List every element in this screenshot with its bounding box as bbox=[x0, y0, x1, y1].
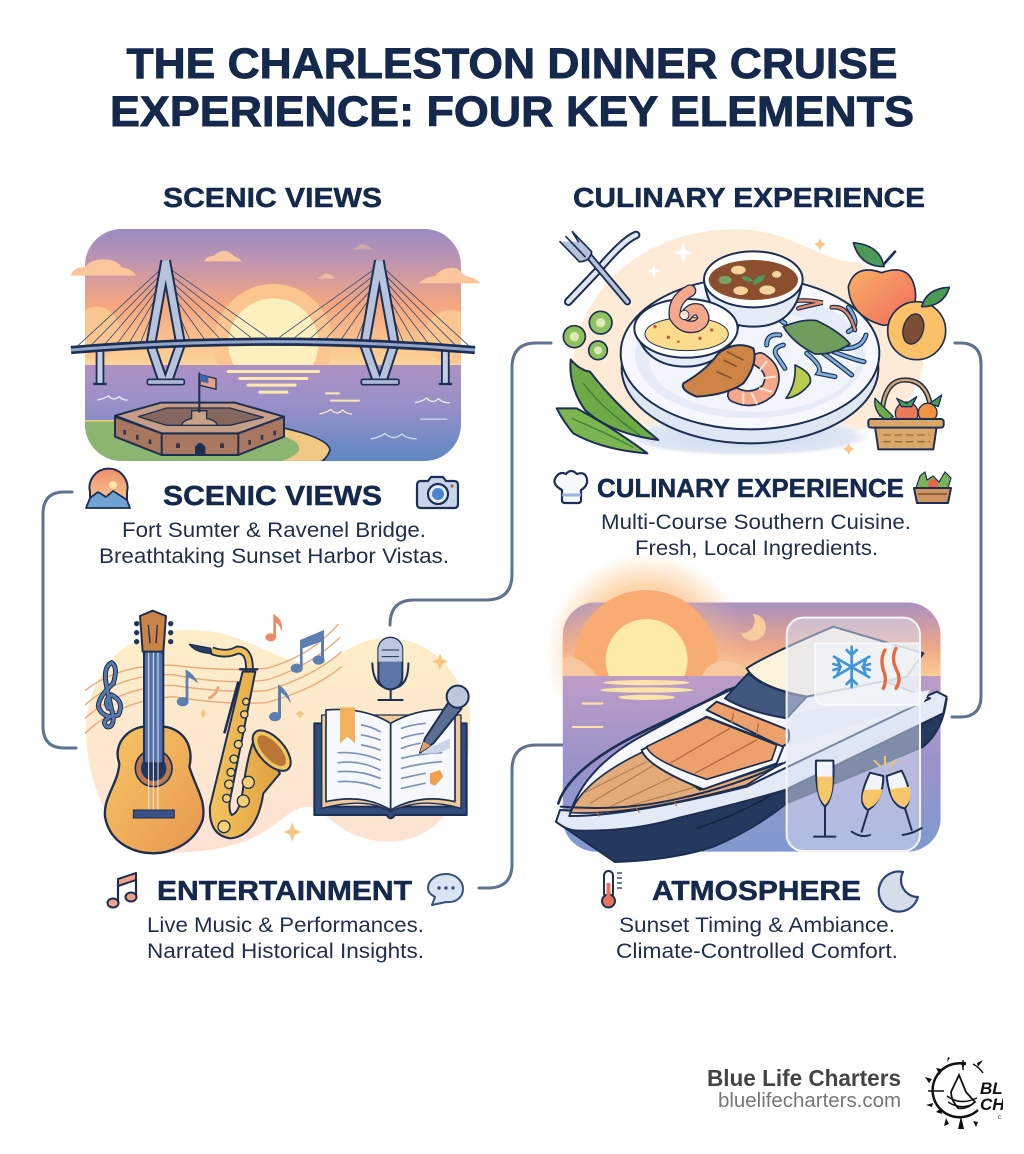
illustration: atmosphere, boat at sunset bbox=[547, 553, 947, 862]
heading: scenic views: SCENIC VIEWS bbox=[163, 182, 382, 213]
champagne flutes bbox=[814, 757, 922, 837]
description: entertainment: Live Music & Performances. bbox=[147, 914, 424, 937]
fish bbox=[683, 345, 755, 397]
hull bbox=[556, 698, 947, 862]
title bbox=[110, 40, 914, 136]
label: culinary experience: CULINARY EXPERIENCE bbox=[597, 473, 904, 503]
label: atmosphere: ATMOSPHERE bbox=[652, 875, 861, 906]
footer logo: c bbox=[998, 1115, 1001, 1121]
crab legs bbox=[767, 300, 866, 377]
hand microphone bbox=[420, 700, 462, 753]
lime bbox=[786, 365, 811, 398]
saxophone bbox=[212, 650, 249, 672]
heading: culinary experience: CULINARY EXPERIENCE bbox=[573, 182, 925, 213]
fork and knife bbox=[568, 235, 636, 302]
okra slices bbox=[563, 311, 612, 360]
soup bowl bbox=[704, 280, 802, 327]
description: culinary experience: Multi-Course Southern Cuisine. bbox=[601, 511, 911, 534]
gunwale bbox=[556, 692, 947, 831]
illustration: culinary, plate of southern food bbox=[557, 229, 949, 457]
notes bbox=[177, 630, 325, 721]
rail bbox=[558, 687, 737, 803]
description: atmosphere bbox=[616, 914, 898, 963]
clouds bbox=[71, 244, 481, 283]
sparkles bbox=[432, 653, 448, 670]
moon bbox=[741, 614, 766, 641]
shrimp on grits bbox=[675, 291, 703, 327]
description: entertainment: Narrated Historical Insights. bbox=[147, 940, 424, 963]
icon: sun over mountains bbox=[86, 469, 130, 508]
icon: speech bubble bbox=[428, 874, 463, 905]
sun glow bbox=[547, 553, 747, 753]
footer logo: CH bbox=[980, 1095, 1005, 1114]
piers bbox=[100, 351, 445, 383]
illustration: scenic views, bridge and fort at sunset bbox=[71, 229, 481, 463]
description: entertainment bbox=[147, 914, 424, 963]
description: scenic views: Breathtaking Sunset Harbor Vistas. bbox=[99, 545, 449, 568]
footer logo bbox=[925, 1057, 1024, 1130]
book bbox=[314, 723, 467, 818]
lounge cushions bbox=[707, 702, 789, 747]
footer brand text: Blue Life Charters bbox=[707, 1065, 901, 1091]
description: scenic views bbox=[99, 519, 449, 568]
icon: crescent moon bbox=[879, 872, 918, 912]
guitar bbox=[105, 726, 203, 853]
heat waves bbox=[882, 650, 885, 688]
label: scenic views: SCENIC VIEWS bbox=[163, 480, 382, 511]
description: culinary experience: Fresh, Local Ingredients. bbox=[635, 537, 878, 560]
connector: culinary to atmosphere bbox=[952, 343, 981, 717]
cables bbox=[78, 271, 468, 345]
icon: vegetable basket bbox=[914, 472, 951, 503]
plate bbox=[622, 293, 878, 443]
illustration: entertainment, instruments and book bbox=[85, 611, 470, 853]
waves bbox=[97, 396, 450, 439]
grits bowl bbox=[635, 327, 738, 367]
label: entertainment: ENTERTAINMENT bbox=[157, 875, 412, 906]
footer brand text: bluelifecharters.com bbox=[718, 1090, 901, 1112]
microphone bbox=[372, 663, 408, 688]
connector: entertainment to culinary bbox=[390, 343, 551, 625]
cabin bbox=[747, 627, 923, 697]
title: THE CHARLESTON DINNER CRUISE bbox=[126, 40, 898, 88]
footer brand text bbox=[707, 1065, 901, 1112]
sun bbox=[574, 590, 718, 733]
title: EXPERIENCE: FOUR KEY ELEMENTS bbox=[110, 88, 914, 136]
icon: chef hat bbox=[554, 471, 587, 503]
description: atmosphere: Sunset Timing & Ambiance. bbox=[619, 914, 895, 937]
icon: thermometer bbox=[602, 871, 622, 908]
shrimp bbox=[735, 360, 775, 403]
description: atmosphere: Climate-Controlled Comfort. bbox=[616, 940, 898, 963]
basket bbox=[882, 380, 932, 417]
peaches bbox=[848, 270, 916, 325]
towers bbox=[151, 261, 394, 379]
background blob bbox=[574, 229, 923, 441]
connector: scenic views to entertainment bbox=[43, 492, 76, 748]
description: culinary experience bbox=[601, 511, 911, 560]
icon: music note bbox=[108, 873, 136, 908]
snowflake bbox=[833, 647, 870, 687]
treble clef bbox=[98, 663, 121, 727]
connector: entertainment to atmosphere bbox=[479, 745, 562, 888]
deck bbox=[71, 342, 475, 350]
icon: camera bbox=[417, 477, 458, 508]
staff lines bbox=[85, 624, 342, 733]
okra pods bbox=[570, 359, 658, 440]
glass panel bbox=[787, 618, 920, 851]
background blob bbox=[86, 630, 470, 853]
description: scenic views: Fort Sumter & Ravenel Bridge. bbox=[122, 519, 426, 542]
deck bbox=[569, 660, 930, 816]
flag bbox=[196, 373, 202, 412]
sparkles bbox=[674, 243, 693, 263]
fort bbox=[115, 417, 284, 455]
